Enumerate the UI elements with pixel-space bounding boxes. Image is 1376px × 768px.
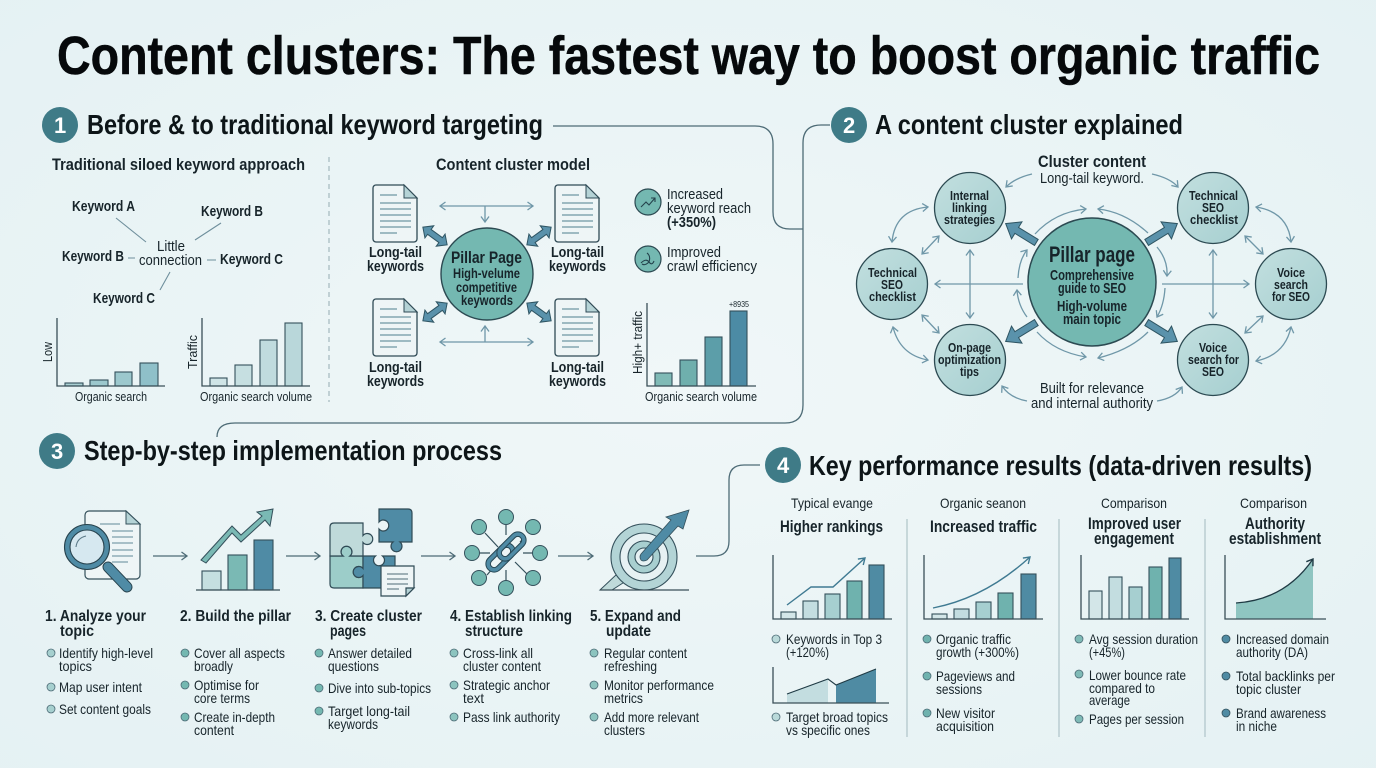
column: authority establishment: establishment <box>1229 529 1321 548</box>
pillar page circle <box>441 228 533 320</box>
column: improved user engagement: (+45%) <box>1089 644 1125 660</box>
step 1: analyze your topic: Set content goals <box>59 701 151 717</box>
column: higher rankings: (+120%) <box>786 644 829 660</box>
document bottom-left <box>373 299 417 356</box>
step 2: build the pillar: content <box>194 722 234 738</box>
pillar page circle: Pillar page <box>1049 242 1135 267</box>
siloed keyword diagram: Keyword A <box>72 198 135 215</box>
bar chart: traffic: Traffic <box>186 335 200 369</box>
pillar page circle: main topic <box>1063 311 1121 328</box>
column: higher rankings: Target broad topics <box>786 709 888 725</box>
siloed keyword diagram: Keyword C <box>220 251 283 268</box>
column: increased traffic <box>923 495 1043 734</box>
section 3 heading: Step-by-step implementation process <box>84 435 502 466</box>
long-tail labels: Long-tail <box>369 244 422 261</box>
step 3: create cluster pages: Answer detailed <box>328 645 412 661</box>
step 4: establish linking structure: text <box>463 690 484 706</box>
arrow <box>153 555 187 557</box>
document top-left <box>373 185 417 242</box>
step 5: expand and update: Monitor performance <box>604 677 714 693</box>
long-tail labels: Long-tail <box>551 359 604 376</box>
step 4: establish linking structure: Cross-link all <box>463 645 533 661</box>
step 1: analyze your topic: topic <box>60 623 94 640</box>
step 5: expand and update: update <box>606 623 651 640</box>
benefit: keyword reach <box>635 186 751 231</box>
column: authority establishment: authority (DA) <box>1236 644 1308 660</box>
node: internal linking strategies: linking <box>952 200 987 215</box>
column: increased traffic: acquisition <box>936 718 994 734</box>
node: voice search for SEO right: Voice <box>1277 265 1305 280</box>
node: voice search for SEO bottom: Voice <box>1199 340 1227 355</box>
column: increased traffic: Organic traffic <box>936 631 1011 647</box>
node: technical SEO checklist left: SEO <box>881 277 903 292</box>
siloed keyword diagram: Little <box>157 238 185 255</box>
column: authority establishment: topic cluster <box>1236 681 1301 697</box>
step 5: expand and update: refreshing <box>604 658 657 674</box>
node: on-page optimization tips <box>934 324 1006 396</box>
document bottom-right <box>555 299 599 356</box>
cluster content caption <box>1038 152 1146 187</box>
node: technical SEO checklist left <box>856 248 928 320</box>
column: improved user engagement: engagement <box>1094 529 1174 548</box>
bar chart: low organic search <box>41 318 165 404</box>
node: voice search for SEO right <box>1256 248 1326 320</box>
step 2: build the pillar: Create in-depth <box>194 709 275 725</box>
long-tail labels: Long-tail <box>369 359 422 376</box>
pillar page circle: High-velume <box>453 265 520 281</box>
node: voice search for SEO right: search <box>1274 277 1308 292</box>
panel: section 3 implementation process <box>39 433 714 738</box>
content cluster model heading: Content cluster model <box>436 155 590 174</box>
node: voice search for SEO bottom <box>1178 324 1248 396</box>
step 3: create cluster pages: Dive into sub-topics <box>328 680 431 696</box>
bar chart: high traffic: +8935 <box>729 300 749 309</box>
step 2: build the pillar <box>180 608 291 738</box>
section 3 heading <box>39 433 502 469</box>
step 5: expand and update: 5. Expand and <box>590 608 681 625</box>
section 2 heading: A content cluster explained <box>875 109 1183 140</box>
step 4: establish linking structure: 4. Establish linking <box>450 608 572 625</box>
pillar page circle: keywords <box>461 292 513 308</box>
column: improved user engagement: average <box>1089 692 1130 708</box>
column: authority establishment: Brand awareness <box>1236 705 1326 721</box>
arrow <box>421 555 455 557</box>
icon: puzzle pieces <box>330 509 414 596</box>
bar chart: rankings <box>773 555 892 619</box>
bar chart: engagement <box>1081 555 1189 619</box>
column: higher rankings: Keywords in Top 3 <box>786 631 882 647</box>
bar chart: traffic: Organic search volume <box>200 390 312 404</box>
connector: section 1 to section 2 <box>553 126 803 229</box>
node: on-page optimization tips: tips <box>960 364 979 379</box>
traditional approach heading: Traditional siloed keyword approach <box>52 155 305 174</box>
step 1: analyze your topic: Identify high-level <box>59 645 153 661</box>
bar chart: low organic search: Low <box>41 341 55 362</box>
benefit: keyword reach: Increased <box>667 186 723 203</box>
column: increased traffic: growth (+300%) <box>936 644 1019 660</box>
cluster content caption: Long-tail keyword. <box>1040 170 1144 187</box>
area chart: authority growth <box>1225 555 1326 619</box>
column: higher rankings: Typical evange <box>791 495 873 511</box>
step 4: establish linking structure: structure <box>465 623 523 640</box>
panel: section 4 performance results <box>765 447 1335 738</box>
step 5: expand and update: Regular content <box>604 645 687 661</box>
step 1: analyze your topic <box>45 608 153 717</box>
siloed keyword diagram: Keyword C <box>93 290 155 307</box>
step 3: create cluster pages: keywords <box>328 716 378 732</box>
column: authority establishment <box>1222 495 1335 734</box>
section 2 heading: 2 <box>843 113 855 138</box>
column: increased traffic: Increased traffic <box>930 517 1037 536</box>
node: technical SEO checklist right: SEO <box>1202 200 1224 215</box>
long-tail labels: keywords <box>367 373 424 390</box>
long-tail labels: keywords <box>549 373 606 390</box>
bar chart: low organic search: Organic search <box>75 390 147 404</box>
step 3: create cluster pages <box>315 608 431 732</box>
thick double arrows to pillar <box>418 221 556 327</box>
icon: magnifier on document <box>64 511 140 587</box>
pillar page circle: Comprehensive <box>1050 267 1134 284</box>
siloed keyword diagram: Keyword B <box>62 248 124 265</box>
section 1 heading: 1 <box>54 113 66 138</box>
step 3: create cluster pages: pages <box>330 623 366 640</box>
long-tail labels: keywords <box>549 258 606 275</box>
step 4: establish linking structure <box>450 608 572 725</box>
node: voice search for SEO bottom: search for <box>1188 352 1239 367</box>
step 1: analyze your topic: Map user intent <box>59 679 142 695</box>
long-tail labels <box>367 244 606 390</box>
column: increased traffic: sessions <box>936 681 982 697</box>
cluster model diagram <box>367 185 606 390</box>
node: technical SEO checklist right: checklist <box>1190 212 1239 227</box>
connector: section 3 to section 4 <box>696 465 760 556</box>
column: improved user engagement: Comparison <box>1101 495 1167 511</box>
column: increased traffic: New visitor <box>936 705 995 721</box>
bar chart: traffic <box>186 318 312 404</box>
siloed keyword diagram <box>62 198 283 307</box>
column: higher rankings: Higher rankings <box>780 517 883 536</box>
arrow <box>558 555 593 557</box>
node: on-page optimization tips: On-page <box>948 340 991 355</box>
panel: section 1 before and after <box>41 107 757 404</box>
step 3: create cluster pages: questions <box>328 658 379 674</box>
pillar page circle: Pillar Page <box>451 248 522 267</box>
long-tail labels: keywords <box>367 258 424 275</box>
bar chart: high traffic: High+ traffic <box>631 311 645 374</box>
step 2: build the pillar: Cover all aspects <box>194 645 285 661</box>
connector: section 2 to section 3 <box>217 125 830 437</box>
thin linking arrows <box>440 206 533 342</box>
icon: chain link network <box>464 510 548 596</box>
section 1 heading <box>42 107 543 143</box>
caption: built for relevance <box>1031 380 1153 412</box>
step 5: expand and update: clusters <box>604 722 645 738</box>
thin connector arrows <box>892 174 1291 401</box>
bar chart: traffic growth <box>924 555 1043 619</box>
step 5: expand and update: Add more relevant <box>604 709 699 725</box>
caption: built for relevance: Built for relevance <box>1040 380 1144 397</box>
benefit: crawl efficiency: crawl efficiency <box>667 258 757 275</box>
step 1: analyze your topic: topics <box>59 658 92 674</box>
benefit: keyword reach: (+350%) <box>667 214 716 231</box>
step 2: build the pillar: core terms <box>194 690 250 706</box>
section 1 heading: Before & to traditional keyword targeting <box>87 109 543 140</box>
column: improved user engagement: compared to <box>1089 680 1155 696</box>
node: internal linking strategies <box>934 172 1006 244</box>
pillar page circle <box>1028 218 1156 346</box>
pillar page circle: guide to SEO <box>1058 280 1126 297</box>
siloed keyword diagram: connection <box>139 252 202 269</box>
arrow <box>286 555 320 557</box>
bar chart: high traffic <box>631 300 757 404</box>
step 2: build the pillar: 2. Build the pillar <box>180 608 291 625</box>
step 3: create cluster pages: Target long-tail <box>328 703 410 719</box>
siloed keyword diagram: Keyword B <box>201 203 263 220</box>
column: authority establishment: in niche <box>1236 718 1277 734</box>
step 2: build the pillar: broadly <box>194 658 233 674</box>
step 4: establish linking structure: Strategic anchor <box>463 677 550 693</box>
step 4: establish linking structure: Pass link authority <box>463 709 560 725</box>
column: increased traffic: Organic seanon <box>940 495 1026 511</box>
icon: target with arrow <box>600 510 689 590</box>
benefit: keyword reach: keyword reach <box>667 200 751 217</box>
section 4 heading: 4 <box>777 453 790 478</box>
section 3 heading: 3 <box>51 439 63 464</box>
step 3: create cluster pages: 3. Create cluster <box>315 608 422 625</box>
document top-right <box>555 185 599 242</box>
node: on-page optimization tips: optimization <box>938 352 1001 367</box>
column: improved user engagement: Lower bounce rate <box>1089 667 1186 683</box>
cluster content caption: Cluster content <box>1038 152 1146 171</box>
node: technical SEO checklist left: checklist <box>869 289 917 304</box>
node: voice search for SEO bottom: SEO <box>1202 364 1224 379</box>
pillar page circle: High-volume <box>1057 298 1127 315</box>
column: authority establishment: Comparison <box>1240 495 1307 511</box>
benefit: crawl efficiency: Improved <box>667 244 721 261</box>
step 5: expand and update: metrics <box>604 690 643 706</box>
column: improved user engagement <box>1075 495 1198 727</box>
long-tail labels: Long-tail <box>551 244 604 261</box>
column: higher rankings: vs specific ones <box>786 722 870 738</box>
node: technical SEO checklist right: Technical <box>1189 188 1238 203</box>
step 4: establish linking structure: cluster content <box>463 658 541 674</box>
icon: rising bars with arrow <box>196 509 280 590</box>
node: technical SEO checklist right <box>1178 172 1248 244</box>
column: authority establishment: Total backlinks per <box>1236 668 1335 684</box>
caption: built for relevance: and internal authority <box>1031 395 1153 412</box>
step 2: build the pillar: Optimise for <box>194 677 259 693</box>
column: higher rankings <box>772 495 892 738</box>
column: improved user engagement: Pages per session <box>1089 711 1184 727</box>
pillar page circle: competitive <box>456 279 517 295</box>
thick arrows from pillar <box>1000 215 1183 350</box>
column: authority establishment: Authority <box>1245 514 1305 533</box>
step 1: analyze your topic: 1. Analyze your <box>45 608 146 625</box>
column: improved user engagement: Avg session duration <box>1089 631 1198 647</box>
section 2 heading <box>831 107 1183 143</box>
bar chart: high traffic: Organic search volume <box>645 390 757 404</box>
benefit: crawl efficiency <box>635 244 757 275</box>
column: increased traffic: Pageviews and <box>936 668 1015 684</box>
node: internal linking strategies: strategies <box>944 212 995 227</box>
column: improved user engagement: Improved user <box>1088 514 1181 533</box>
column: authority establishment: Increased domain <box>1236 631 1329 647</box>
area chart: broad vs specific <box>773 667 889 703</box>
panel: section 2 content cluster explained <box>831 107 1326 412</box>
node: technical SEO checklist left: Technical <box>868 265 917 280</box>
node: internal linking strategies: Internal <box>950 188 989 203</box>
step 5: expand and update <box>590 608 714 738</box>
node: voice search for SEO right: for SEO <box>1272 289 1310 304</box>
